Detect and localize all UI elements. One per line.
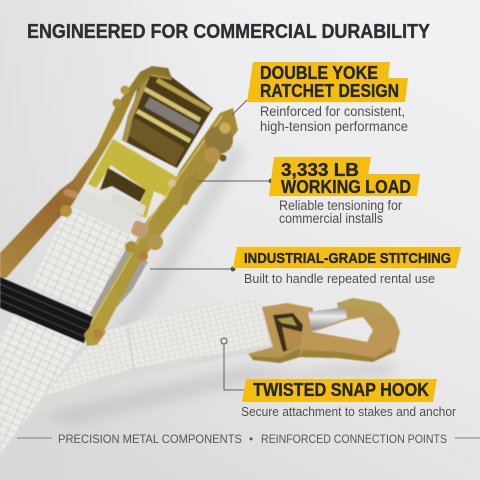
heading: INDUSTRIAL-GRADE STITCHING: [244, 250, 451, 267]
ratchet right side plate: [84, 108, 238, 346]
twisted snap hook: [245, 298, 400, 363]
leader line: stitching: [150, 267, 235, 271]
leader line: working load: [197, 179, 273, 183]
description: Reliable tensioning for: [279, 198, 402, 213]
heading: 3,333 LB: [281, 160, 359, 180]
yellow label: [269, 157, 420, 196]
ratchet left side arm: [0, 66, 172, 280]
yoke center plate: [88, 139, 177, 218]
description: commercial installs: [279, 211, 383, 226]
yellow label: [242, 379, 437, 402]
ratchet rivets and bolts: [60, 179, 176, 261]
description: Reinforced for consistent,: [260, 104, 405, 119]
long webbing strap running behind handle: [0, 314, 82, 454]
handle end bracket and rivet: [84, 320, 106, 346]
spring gate pin: [308, 307, 347, 331]
leader line: snap hook: [221, 338, 246, 390]
description: Built to handle repeated rental use: [244, 271, 435, 286]
heading: RATCHET DESIGN: [260, 81, 399, 101]
ratchet barrel with rollers: [122, 68, 213, 168]
gray strap section under plate: [90, 245, 150, 328]
footer text: PRECISION METAL COMPONENTS: [58, 434, 242, 446]
leader line: double yoke: [232, 100, 247, 115]
heading: TWISTED SNAP HOOK: [253, 380, 429, 400]
heading: DOUBLE YOKE: [260, 63, 378, 83]
description: high-tension performance: [260, 119, 408, 134]
footer text: REINFORCED CONNECTION POINTS: [261, 434, 447, 446]
hook-side webbing strap: [28, 297, 273, 417]
footer strip: [17, 434, 480, 446]
ratchet gear: [204, 122, 233, 163]
yellow label: [247, 62, 408, 102]
callout: industrial-grade stitching: [233, 247, 461, 286]
callout: double yoke ratchet design: [247, 62, 408, 134]
heading: WORKING LOAD: [281, 177, 411, 197]
soft shadows: [40, 140, 395, 425]
upper webbing strap through ratchet: [30, 187, 144, 313]
callout: twisted snap hook: [241, 379, 457, 419]
callout: 3,333 lb working load: [269, 157, 420, 226]
product photo: ratchet strap illustration: [0, 66, 400, 454]
black rubber handle grip: [0, 277, 93, 343]
footer text: •: [249, 434, 253, 446]
description: Secure attachment to stakes and anchor: [241, 404, 457, 419]
title: ENGINEERED FOR COMMERCIAL DURABILITY: [27, 21, 431, 43]
yellow label: [233, 247, 461, 268]
